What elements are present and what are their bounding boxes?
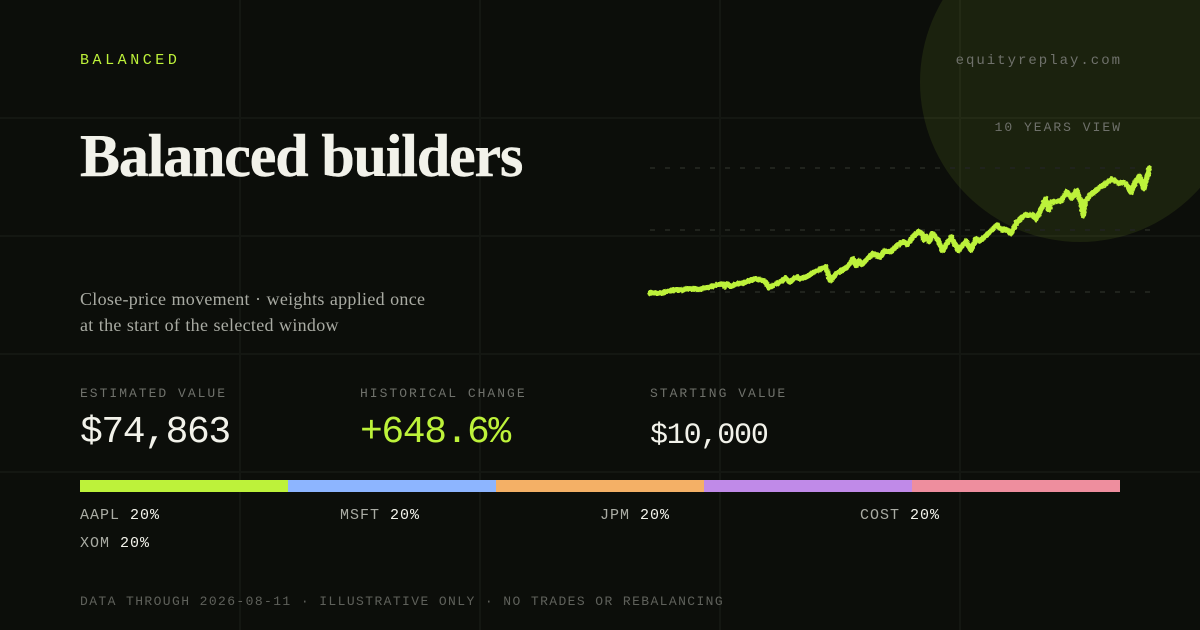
stat: starting value: STARTING VALUE: [650, 386, 787, 401]
site name: equityreplay.com: [956, 53, 1122, 69]
legend: AAPL: AAPL 20%: [80, 507, 160, 524]
stat: historical change: [360, 386, 527, 454]
stat: historical change: +648.6%: [360, 411, 510, 454]
allocation bar: [80, 480, 1120, 492]
stat: estimated value: ESTIMATED VALUE: [80, 386, 227, 401]
legend: JPM: JPM 20%: [600, 507, 670, 524]
subtitle: [80, 289, 425, 335]
legend: MSFT: MSFT 20%: [340, 507, 420, 524]
title: Balanced builders: [80, 123, 522, 189]
stat: starting value: $10,000: [650, 419, 768, 453]
stat: starting value: [650, 386, 787, 453]
subtitle: Close-price movement · weights applied once: [80, 289, 425, 309]
category label: BALANCED: [80, 52, 180, 69]
legend: COST: COST 20%: [860, 507, 940, 524]
stat: historical change: HISTORICAL CHANGE: [360, 386, 527, 401]
legend: XOM: XOM 20%: [80, 535, 150, 552]
stat: estimated value: [80, 386, 230, 454]
stat: estimated value: $74,863: [80, 411, 230, 454]
subtitle: at the start of the selected window: [80, 315, 339, 335]
time range label: 10 YEARS VIEW: [995, 120, 1122, 135]
footer note: DATA THROUGH 2026-08-11 · ILLUSTRATIVE ONLY · NO TRADES OR REBALANCING: [80, 594, 724, 609]
